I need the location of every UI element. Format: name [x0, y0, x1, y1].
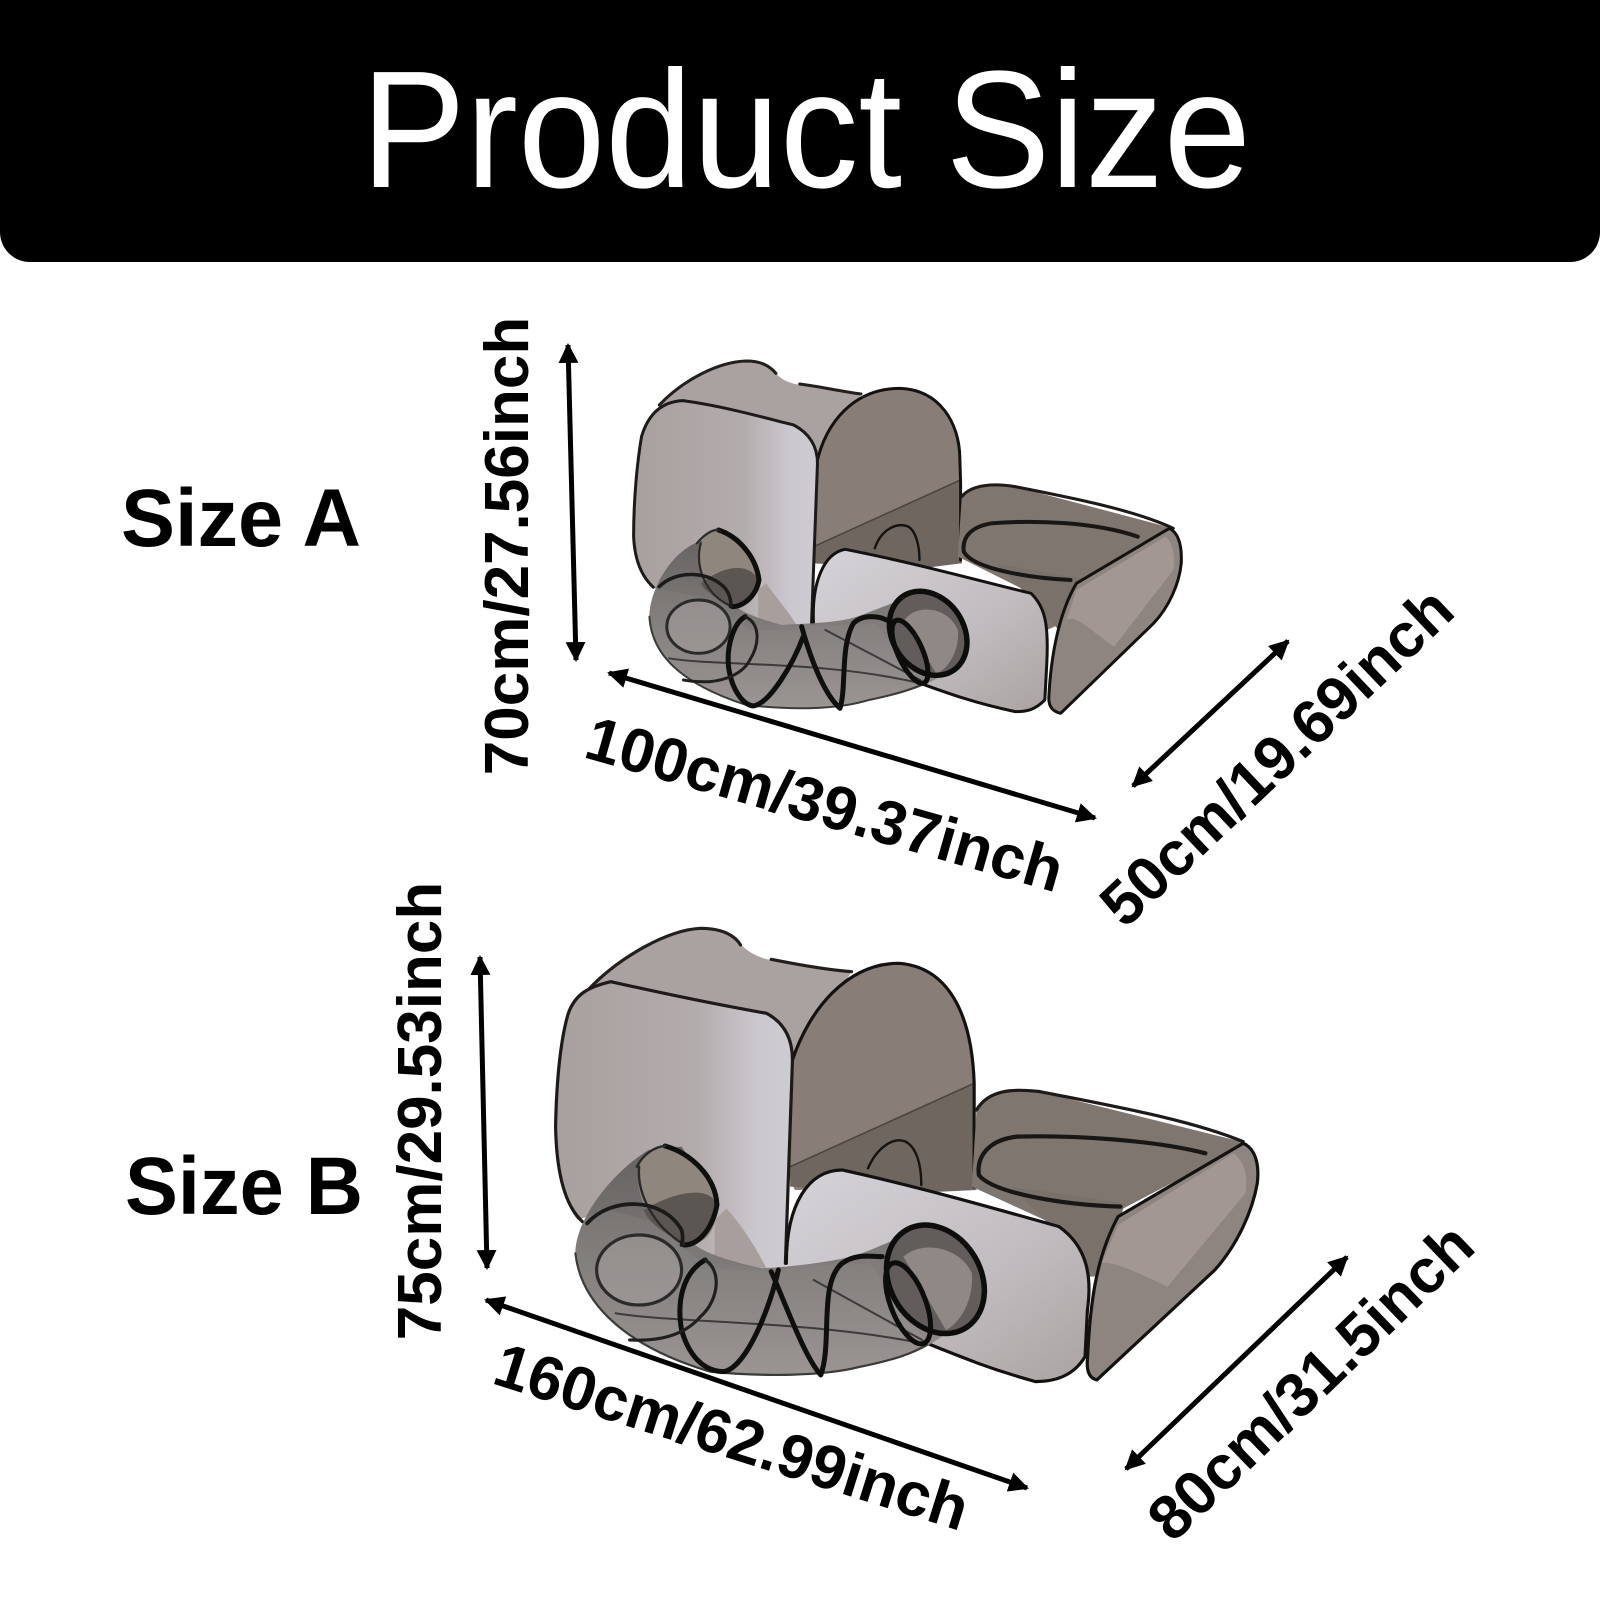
- arrow: Size B height: [480, 957, 487, 1268]
- label: Size A height: 70cm/27.56inch: [473, 317, 542, 775]
- product photo: Size A tent: [634, 361, 1181, 713]
- arrow: Size A depth: [1133, 641, 1288, 786]
- title: Product Size: [361, 37, 1251, 223]
- tunnel: [575, 1140, 998, 1375]
- arrow: Size B depth: [1126, 1257, 1347, 1469]
- label: Size B depth: 80cm/31.5inch: [1135, 1210, 1487, 1554]
- arrow: Size A width: [609, 673, 1095, 818]
- heading: Size B: Size B: [125, 1141, 363, 1232]
- label: Size A width: 100cm/39.37inch: [578, 704, 1071, 906]
- label: Size B height: 75cm/29.53inch: [386, 882, 455, 1340]
- arrow: Size B width: [486, 1300, 1027, 1488]
- tunnel: [649, 524, 980, 708]
- label: Size A depth: 50cm/19.69inch: [1087, 574, 1467, 940]
- product photo: Size B tent: [556, 928, 1258, 1382]
- title banner: [0, 0, 1600, 262]
- arrow: Size A height: [568, 345, 576, 660]
- heading: Size A: Size A: [121, 473, 361, 564]
- label: Size B width: 160cm/62.99inch: [486, 1330, 977, 1544]
